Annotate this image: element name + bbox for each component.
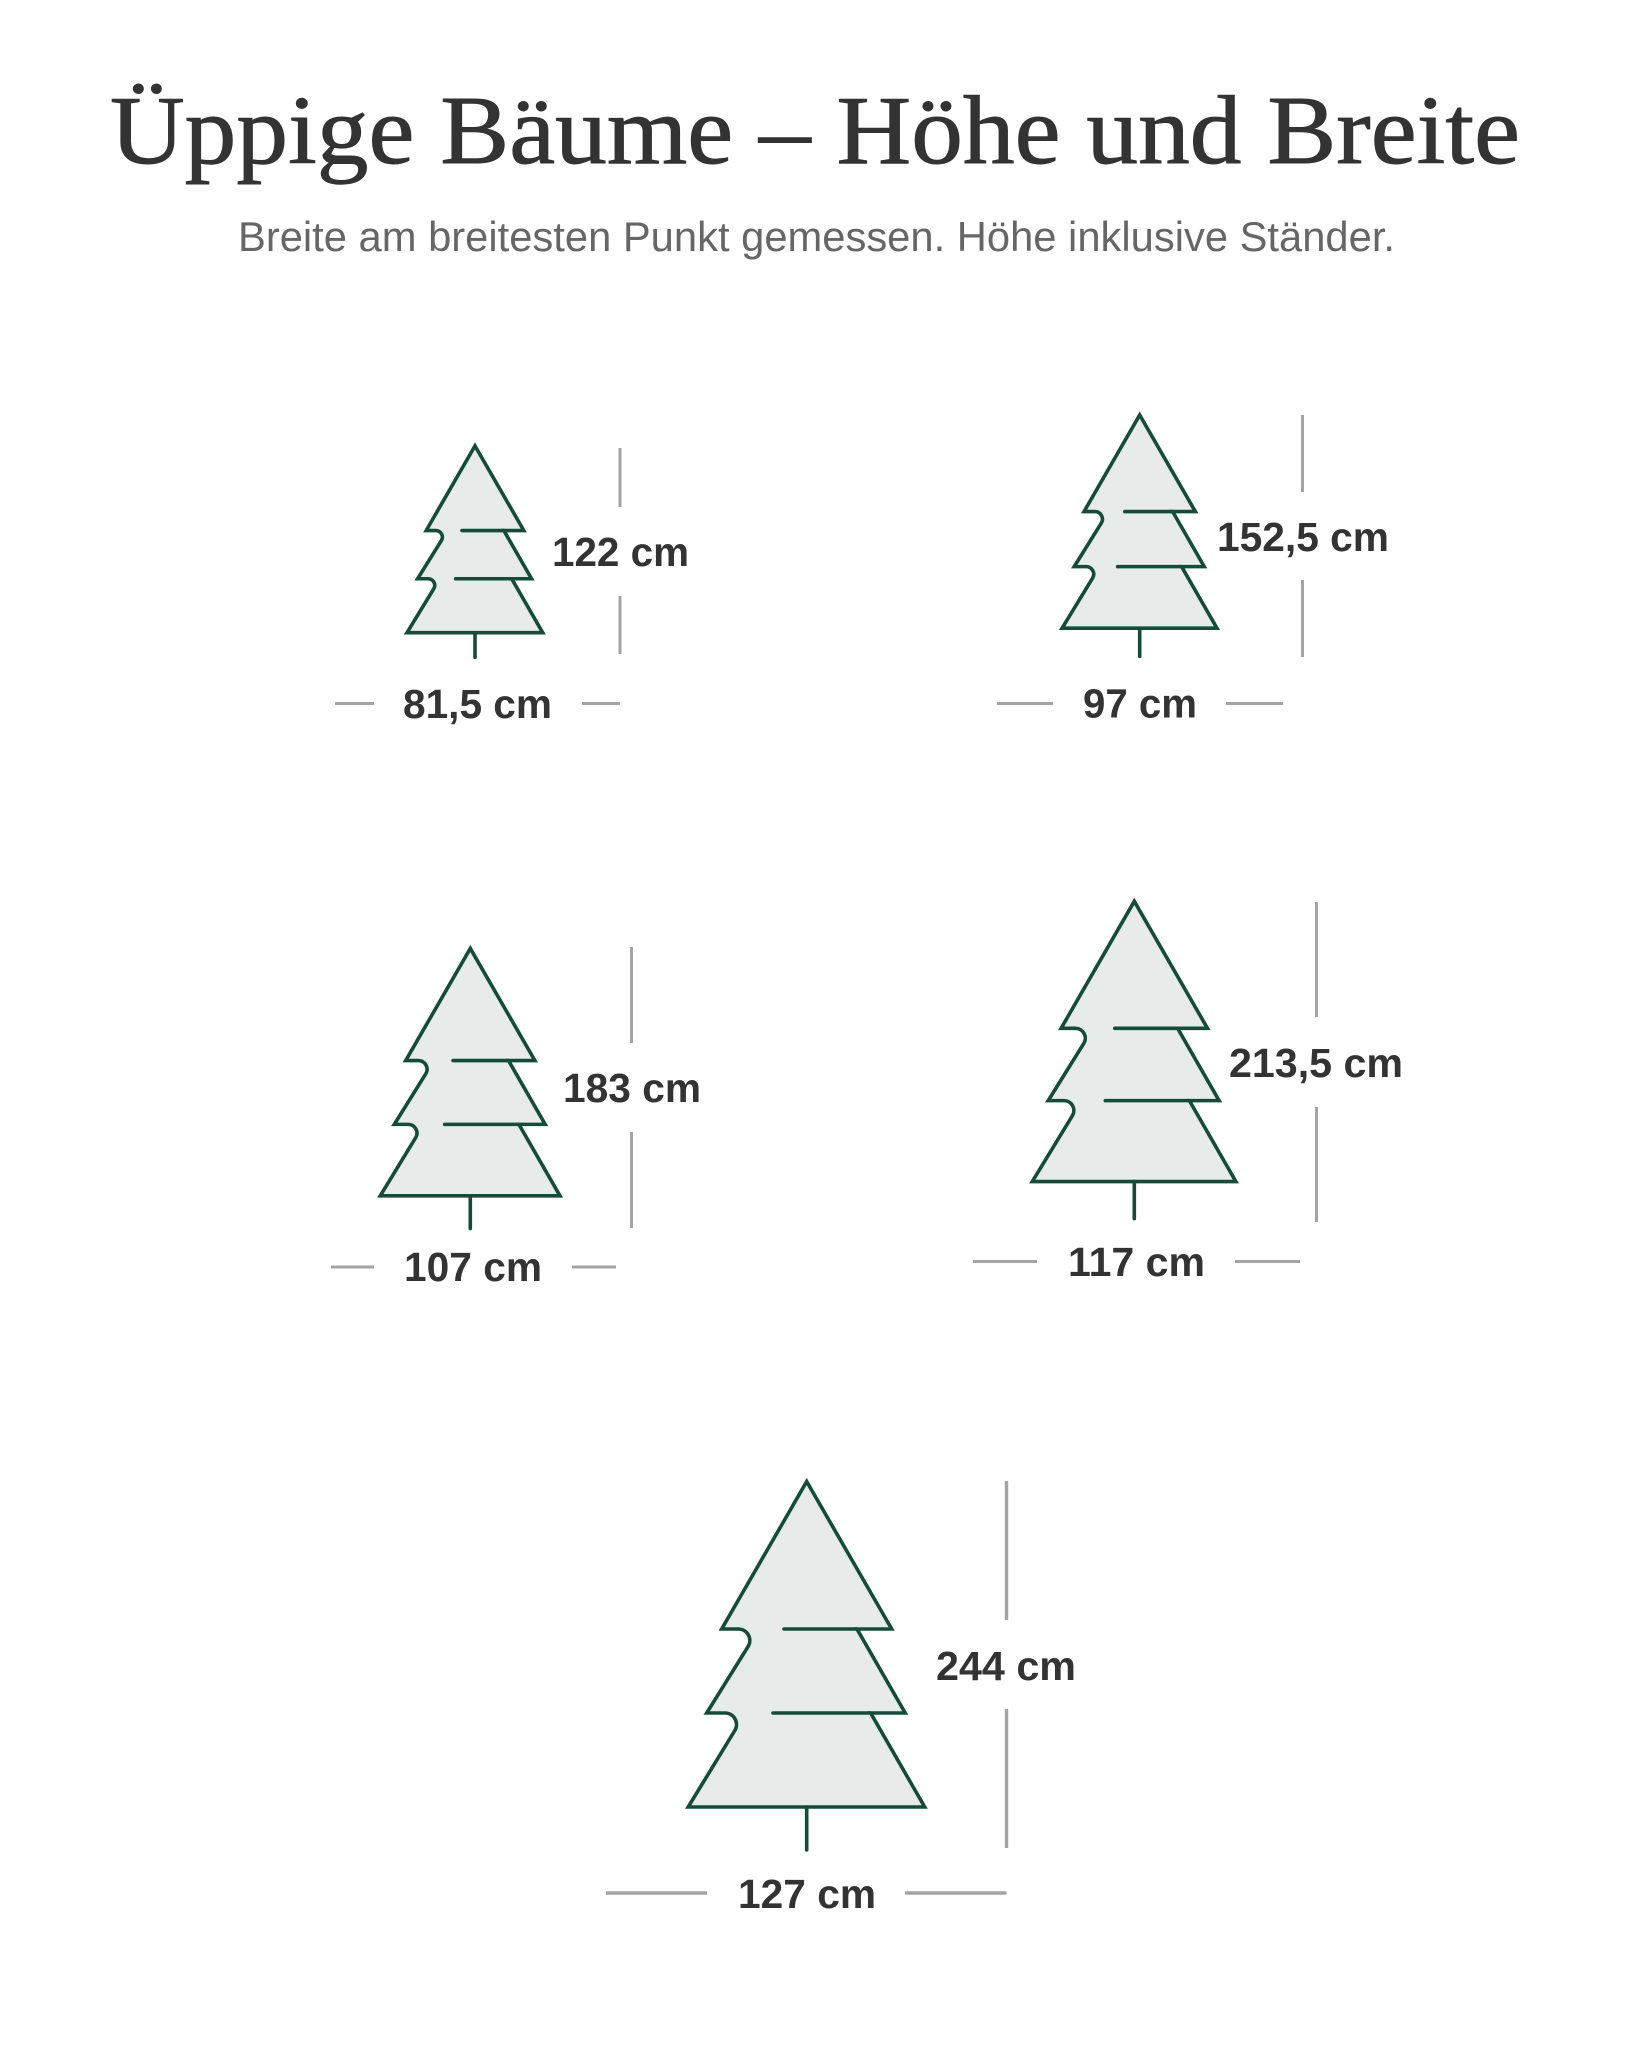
- width label: 117 cm: [1068, 1239, 1205, 1285]
- height line: [630, 947, 633, 1228]
- width line: [973, 1260, 1300, 1263]
- height line: [618, 448, 622, 654]
- icon: tree 213,5 cm: [1032, 901, 1236, 1219]
- width line: [606, 1891, 1006, 1895]
- width line: [335, 702, 620, 705]
- height label: 244 cm: [936, 1643, 1076, 1689]
- height line: [1005, 1481, 1008, 1848]
- width line: [997, 702, 1283, 705]
- panel: tree 183 cm: [331, 947, 701, 1290]
- icon: tree 152,5 cm: [1062, 415, 1217, 656]
- panel: tree 213,5 cm: [973, 901, 1403, 1285]
- height label: 213,5 cm: [1229, 1040, 1403, 1086]
- icon: tree 183 cm: [380, 948, 560, 1228]
- icon: tree 122 cm: [407, 446, 543, 657]
- height line: [1301, 415, 1304, 657]
- height label: 183 cm: [563, 1065, 701, 1111]
- width label: 97 cm: [1083, 680, 1197, 726]
- panel: tree 244 cm: [606, 1481, 1076, 1917]
- width label: 81,5 cm: [403, 681, 552, 727]
- panel: tree 122 cm: [335, 446, 689, 727]
- icon: tree 244 cm: [688, 1482, 925, 1850]
- title: Üppige Bäume – Höhe und Breite: [110, 77, 1520, 185]
- width label: 107 cm: [404, 1244, 542, 1290]
- height line: [1315, 902, 1318, 1222]
- width line: [331, 1266, 616, 1268]
- width label: 127 cm: [738, 1871, 876, 1917]
- height label: 122 cm: [552, 529, 689, 575]
- panel: tree 152,5 cm: [997, 415, 1389, 726]
- height label: 152,5 cm: [1217, 514, 1389, 560]
- subtitle: Breite am breitesten Punkt gemessen. Höhe inklusive Ständer.: [238, 213, 1395, 260]
